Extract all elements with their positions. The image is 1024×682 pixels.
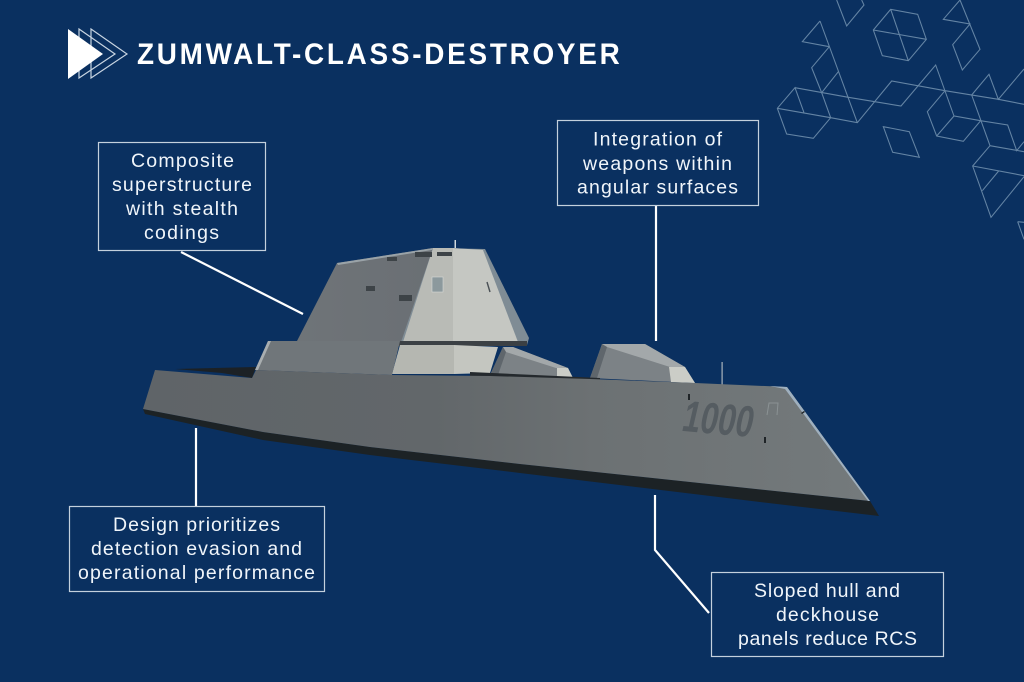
callout: design priorities: Design prioritizes: [113, 514, 280, 536]
callout: design priorities: detection evasion and: [91, 538, 302, 560]
title: ZUMWALT-CLASS-DESTROYER: [137, 38, 622, 71]
bow edge: [770, 386, 870, 501]
callout: composite superstructure: codings: [144, 222, 219, 244]
logo icon: play arrows: [68, 29, 127, 79]
forward gun turret one: [490, 347, 573, 378]
callout line: superstructure: [181, 252, 303, 314]
callout: weapons integration: [558, 120, 758, 206]
lower dark block: [255, 341, 400, 375]
mast: [454, 240, 456, 248]
deck shadow: [175, 367, 256, 378]
callout: weapons integration: weapons within: [582, 153, 732, 175]
superstructure dark face: [297, 248, 433, 345]
hull number: 1000: [681, 392, 755, 447]
callout: design priorities: operational performance: [78, 562, 315, 584]
callout: sloped hull: deckhouse: [776, 604, 879, 626]
callout: composite superstructure: [98, 142, 266, 250]
windows: [366, 252, 452, 301]
hull dark waterline: [143, 409, 879, 516]
hull markings: [688, 394, 805, 443]
callout: sloped hull: panels reduce RCS: [738, 628, 917, 650]
forward gun turret two: [590, 344, 695, 383]
callout: composite superstructure: with stealth: [125, 198, 238, 220]
callout: composite superstructure: superstructure: [112, 174, 252, 196]
callout line: design: [195, 428, 197, 506]
destroyer ship: [143, 240, 879, 516]
hull side: [143, 370, 870, 501]
lower light block: [392, 345, 454, 374]
callout: weapons integration: Integration of: [593, 128, 723, 150]
callout: composite superstructure: Composite: [131, 150, 234, 172]
callout line: weapons: [655, 205, 657, 341]
geometric line pattern: [777, 0, 1024, 239]
callout: sloped hull: [712, 572, 944, 656]
callout: weapons integration: angular surfaces: [577, 176, 738, 198]
superstructure light face: [400, 248, 529, 345]
callout: sloped hull: Sloped hull and: [754, 580, 900, 602]
callout line: hull: [655, 495, 709, 613]
callout: design priorities: [70, 506, 324, 592]
vent band: [392, 341, 527, 346]
